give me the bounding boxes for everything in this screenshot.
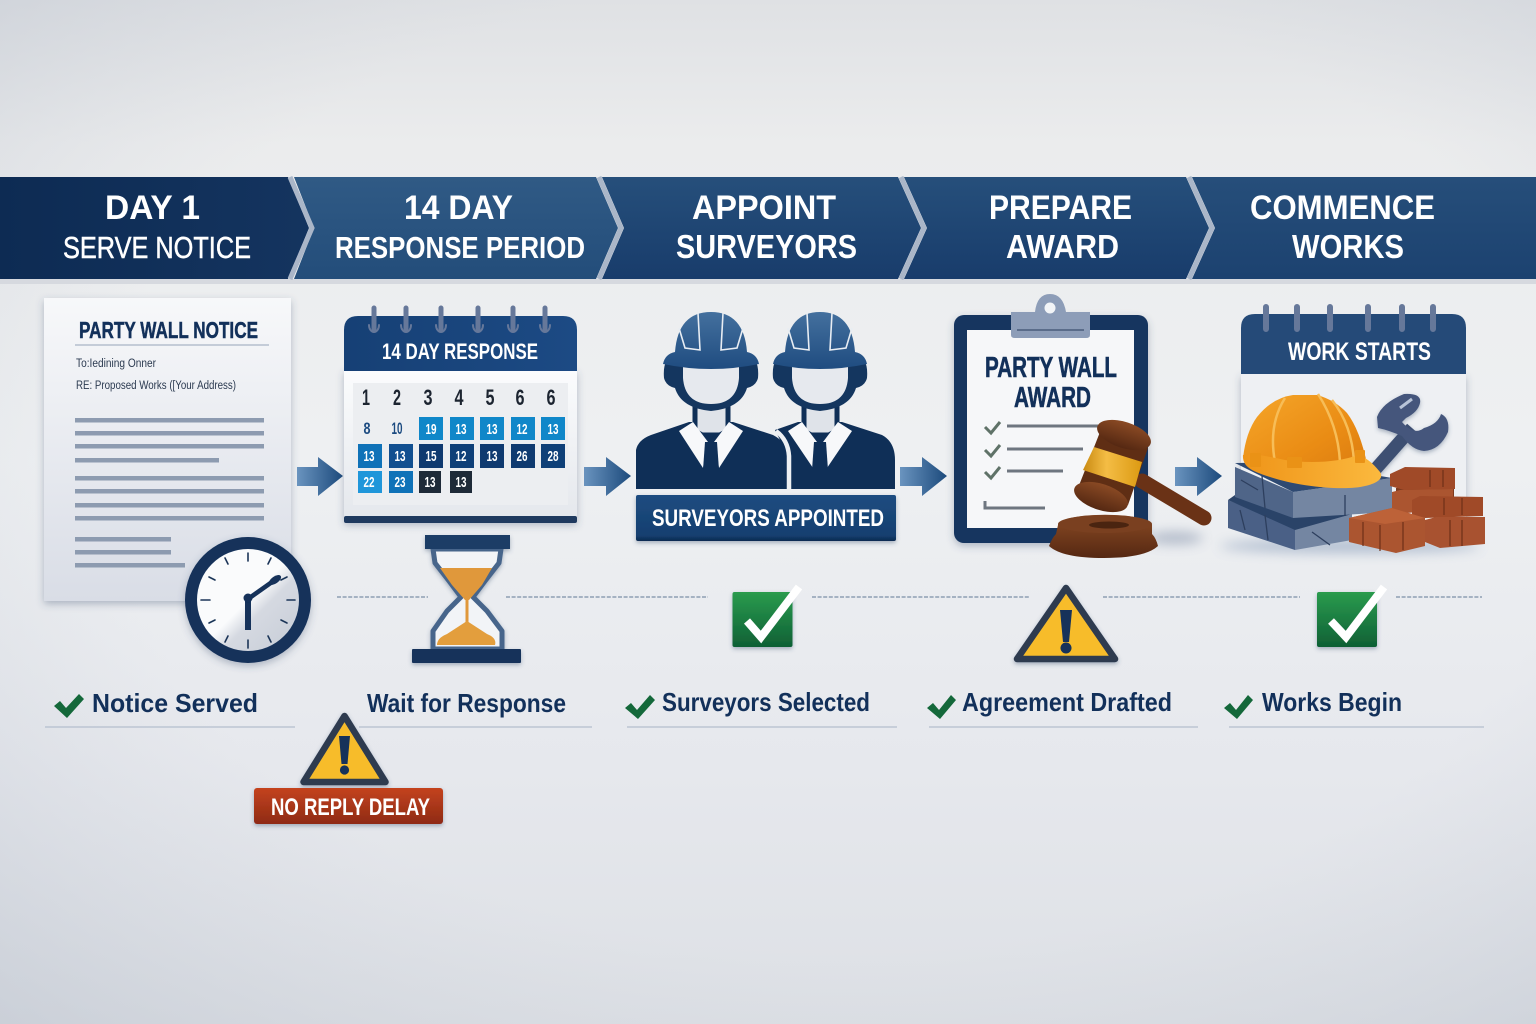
banner step: appoint surveyors: APPOINT	[692, 189, 836, 227]
icon: surveyor left	[636, 312, 789, 489]
icon: tick	[1224, 695, 1253, 719]
status: notice served	[45, 688, 295, 727]
status: surveyors selected	[625, 687, 897, 727]
date grid: 13	[394, 448, 406, 465]
date grid: 12	[516, 421, 528, 438]
document title: PARTY WALL NOTICE	[79, 317, 258, 343]
date grid: 5	[486, 385, 494, 410]
panel: surveyors appointed	[636, 312, 896, 541]
status: agreement drafted	[927, 687, 1198, 727]
date grid: 13	[486, 448, 498, 465]
icon: stone blocks	[1220, 462, 1480, 553]
date grid: 2	[393, 385, 401, 410]
arrow: award to works	[1175, 457, 1222, 496]
calendar heading: 14 DAY RESPONSE	[382, 339, 538, 364]
date grid: 12	[456, 448, 466, 465]
date grid: 13	[456, 421, 466, 438]
body text lines	[75, 418, 264, 568]
banner step: commence works: WORKS	[1292, 228, 1404, 265]
panel: 14 day response calendar	[344, 308, 577, 523]
icon: green check box works	[1317, 587, 1384, 647]
surveyors appointed label bar	[636, 495, 896, 541]
icon: brick stack	[1349, 467, 1485, 553]
icon: tick	[625, 695, 655, 719]
binder rings	[369, 308, 550, 332]
icon: warning triangle award	[1017, 588, 1115, 659]
panel: work starts calendar	[1241, 307, 1466, 520]
banner step: Day 1 serve notice	[0, 177, 309, 279]
banner step: commence works: COMMENCE	[1250, 189, 1435, 227]
date grid: 23	[394, 474, 406, 491]
status: surveyors selected: Surveyors Selected	[662, 687, 870, 717]
date grid: 13	[548, 421, 558, 438]
banner step: prepare award: AWARD	[1006, 228, 1119, 265]
subject line: RE: Proposed Works ([Your Address)	[76, 380, 236, 392]
icon: warning triangle delay	[304, 716, 386, 782]
date grid: 26	[516, 448, 528, 465]
binder rings	[1266, 307, 1433, 329]
panel: party wall award clipboard	[954, 294, 1148, 543]
status: notice served: Notice Served	[92, 688, 258, 718]
icon: tick	[54, 694, 84, 718]
banner step: 14 day response period: 14 DAY	[404, 189, 513, 227]
banner step: prepare award: PREPARE	[989, 189, 1132, 227]
no reply delay badge: NO REPLY DELAY	[271, 794, 430, 821]
date grid	[358, 385, 565, 493]
status: agreement drafted: Agreement Drafted	[962, 687, 1172, 717]
date grid: 8	[364, 419, 370, 438]
work starts heading: WORK STARTS	[1288, 338, 1431, 366]
banner step: appoint surveyors: SURVEYORS	[676, 228, 857, 265]
arrow: notice to response	[297, 457, 343, 496]
arrow: surveyors to award	[900, 457, 947, 496]
banner step: appoint surveyors	[602, 177, 921, 279]
banner step: Day 1 serve notice: DAY 1	[105, 189, 200, 227]
icon: green check box surveyors	[732, 587, 799, 647]
status: works begin: Works Begin	[1262, 687, 1402, 717]
date grid: 1	[362, 385, 370, 410]
icon: clipboard clip	[1011, 294, 1090, 338]
status: wait for response: Wait for Response	[367, 688, 566, 718]
panel: party wall notice document	[44, 298, 291, 601]
date grid: 6	[546, 385, 556, 410]
date grid: 13	[456, 474, 466, 491]
status: works begin	[1224, 687, 1484, 727]
no reply delay badge	[254, 788, 443, 824]
date grid: 4	[454, 385, 464, 410]
date grid: 13	[364, 448, 374, 465]
date grid: 22	[364, 474, 374, 491]
date grid: 6	[516, 385, 524, 410]
icon: clock	[185, 537, 311, 663]
addressee line: To:Iedining Onner	[76, 358, 156, 370]
date grid: 3	[424, 385, 432, 410]
icon: hammer and wrench	[1373, 394, 1448, 472]
award title: PARTY WALL	[985, 352, 1117, 384]
date grid: 19	[426, 421, 436, 438]
banner step: prepare award	[904, 177, 1209, 279]
arrow: response to surveyors	[584, 457, 631, 496]
banner step: 14 day response period	[294, 177, 618, 279]
icon: surveyor right	[773, 312, 895, 489]
surveyors appointed label bar: SURVEYORS APPOINTED	[652, 505, 884, 532]
icon: tick	[927, 695, 956, 719]
date grid: 28	[548, 448, 558, 465]
banner step: Day 1 serve notice: SERVE NOTICE	[63, 230, 251, 265]
banner step: commence works	[1192, 177, 1536, 279]
date grid: 10	[392, 419, 402, 438]
icon: gavel	[1049, 414, 1204, 558]
banner step: 14 day response period: RESPONSE PERIOD	[335, 230, 585, 265]
checklist	[985, 422, 1098, 508]
icon: hourglass	[412, 535, 521, 663]
date grid: 15	[426, 448, 436, 465]
date grid: 13	[424, 474, 436, 491]
timeline banner	[0, 177, 1536, 284]
icon: hard hat	[1243, 394, 1381, 488]
date grid: 13	[486, 421, 498, 438]
panel: party wall award clipboard: AWARD	[1014, 382, 1091, 414]
